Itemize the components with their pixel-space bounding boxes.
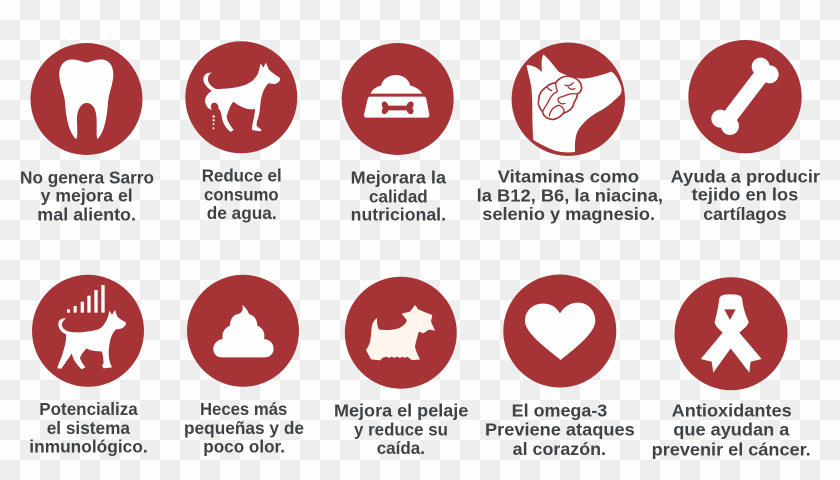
caption: heces: Heces más: [200, 399, 288, 419]
caption: mejorara la calidad: [351, 167, 446, 225]
caption: omega-3: [485, 401, 635, 459]
icon: heart: [503, 274, 616, 388]
caption: heces: pequeñas y de: [184, 418, 304, 438]
caption: vitaminas: la B12, B6, la niacina,: [477, 185, 663, 205]
caption: mejora el pelaje: [334, 401, 469, 458]
caption: reduce el consumo: [202, 166, 282, 223]
icon: poop: [187, 275, 299, 387]
caption: reduce el consumo: Reduce el: [202, 166, 282, 186]
panel: sistema inmunologico: [29, 275, 148, 457]
panel: no genera sarro: [20, 43, 154, 225]
caption: omega-3: al corazón.: [513, 439, 606, 459]
icon: dog with signal bars: [32, 275, 144, 387]
caption: mejorara la calidad: Mejorara la: [351, 167, 446, 187]
caption: mejorara la calidad: nutricional.: [351, 205, 446, 225]
icon: dog head with brain: [512, 42, 625, 156]
caption: potencializa: [29, 399, 148, 457]
caption: vitaminas: selenio y magnesio.: [482, 204, 655, 224]
caption: no genera sarro: y mejora el: [41, 186, 133, 206]
caption: vitaminas: [477, 166, 663, 224]
panel: calidad nutricional: [342, 43, 454, 225]
panel: vitaminas: [477, 42, 663, 224]
caption: vitaminas: Vitaminas como: [498, 166, 639, 186]
caption: potencializa: el sistema: [47, 418, 130, 438]
caption: potencializa: inmunológico.: [29, 437, 148, 457]
icon: terrier dog: [345, 277, 457, 389]
icon: food bowl with bone: [342, 43, 454, 155]
caption: mejorara la calidad: calidad: [369, 186, 428, 206]
caption: no genera sarro: [20, 167, 154, 225]
caption: omega-3: El omega-3: [512, 401, 608, 421]
caption: mejora el pelaje: Mejora el pelaje: [334, 401, 469, 421]
caption: no genera sarro: mal aliento.: [37, 205, 136, 225]
caption: reduce el consumo: consumo: [204, 185, 279, 205]
caption: no genera sarro: No genera Sarro: [20, 167, 154, 187]
caption: heces: [184, 399, 304, 457]
caption: mejora el pelaje: y reduce su: [354, 420, 448, 440]
caption: reduce el consumo: de agua.: [207, 203, 277, 223]
caption: ayuda a producir: cartílagos: [703, 204, 787, 224]
panel: reduce consumo de agua: [185, 41, 297, 223]
icon: tooth: [30, 43, 142, 155]
caption: ayuda a producir: tejido en los: [692, 185, 799, 205]
caption: potencializa: Potencializa: [39, 399, 138, 419]
caption: antioxidantes: que ayudan a: [673, 420, 790, 440]
caption: antioxidantes: Antioxidantes: [672, 401, 792, 421]
caption: antioxidantes: [652, 401, 811, 460]
panel: antioxidantes: [652, 277, 811, 460]
icon: bone: [688, 40, 802, 153]
icon: awareness ribbon: [674, 277, 788, 390]
panel: pelaje: [334, 277, 469, 458]
panel: heces: [184, 275, 304, 457]
caption: ayuda a producir: Ayuda a producir: [671, 167, 820, 187]
panel: omega-3: [485, 274, 635, 459]
caption: ayuda a producir: [671, 167, 820, 224]
panel: cartilagos: [671, 40, 820, 224]
caption: antioxidantes: prevenir el cáncer.: [652, 440, 811, 460]
caption: omega-3: Previene ataques: [485, 420, 635, 440]
caption: heces: poco olor.: [203, 437, 285, 457]
icon: dog urinating: [185, 41, 297, 153]
caption: mejora el pelaje: caída.: [377, 438, 425, 458]
